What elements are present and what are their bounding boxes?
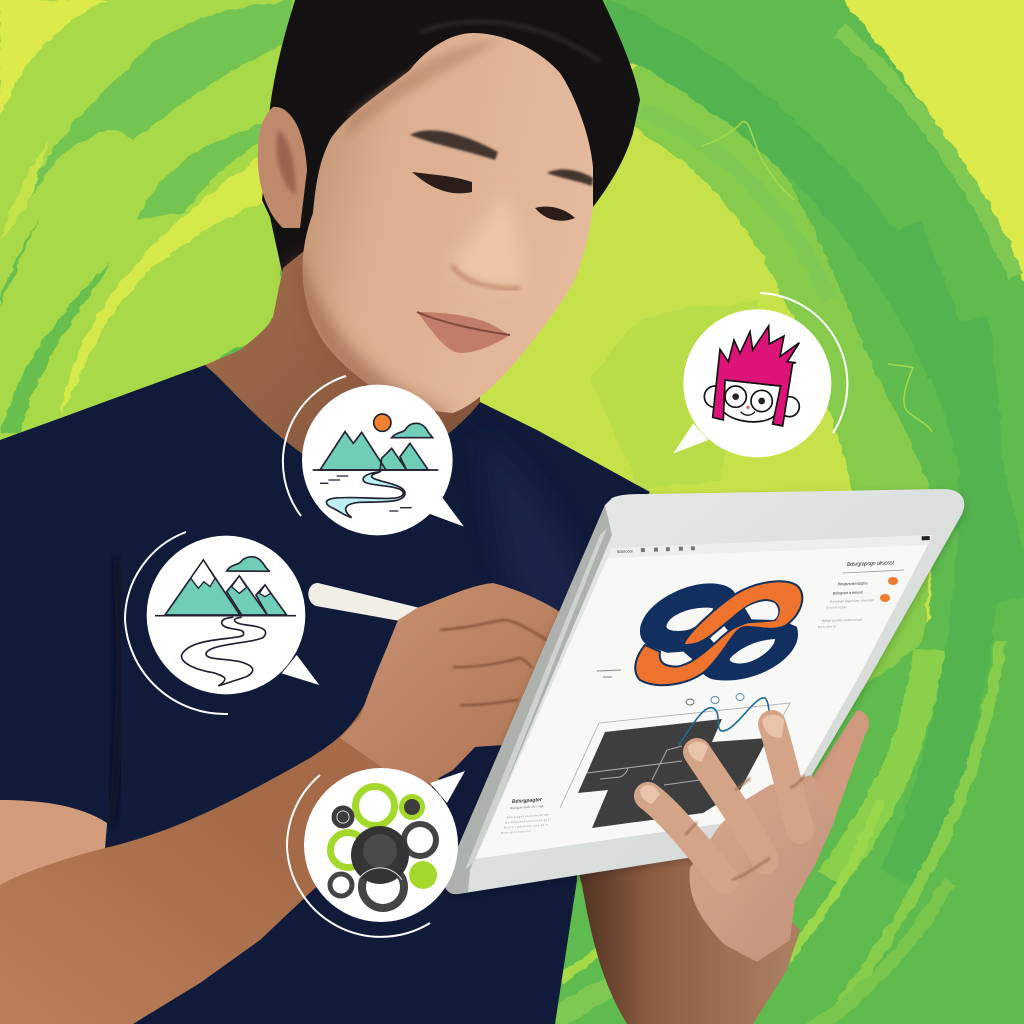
- mouth: [417, 312, 510, 353]
- neck: [205, 230, 480, 480]
- side panel text: Bdsrgr bsnsfts nsdsdsnt pgt: [822, 617, 862, 623]
- bubble body: [428, 497, 464, 527]
- knuckles: [685, 775, 804, 880]
- upper arm below sleeve: [0, 800, 107, 900]
- bubble body: [430, 771, 465, 803]
- left lime and dark: [0, 140, 50, 240]
- upper dark stroke: [30, 0, 293, 197]
- tablet body: [444, 489, 964, 894]
- left light field: [0, 0, 300, 450]
- man's head: [205, 0, 640, 480]
- left hand holding stylus: [340, 583, 560, 783]
- winding road: [182, 617, 266, 686]
- stylus: [308, 583, 420, 621]
- infinity logo: [635, 581, 802, 685]
- bubble body: [673, 423, 708, 453]
- finger nails: [640, 715, 784, 804]
- bottom-left caption: Bdsrgrpgnb dsrsnsmsdsrdsn: [507, 812, 550, 819]
- lower lime stroke: [60, 157, 267, 417]
- bubble: spiky-haired character: [673, 293, 847, 457]
- ring arc: [760, 293, 847, 433]
- eyes: [412, 172, 472, 193]
- top-left lime: [0, 0, 107, 117]
- cloud: [392, 423, 433, 438]
- ears: [704, 386, 726, 407]
- diagram: [560, 694, 790, 828]
- tablet screen: [475, 535, 933, 859]
- river: [326, 472, 405, 518]
- inner lime zone: [470, 60, 933, 700]
- sun: [374, 414, 391, 431]
- side panel text: Bpsrdtsdr: [818, 624, 837, 629]
- jaw shading: [290, 250, 450, 430]
- bottom-left caption: Brsrrsrt pdrsnsdtr pnsrgsrn: [504, 823, 548, 830]
- sleeve fold: [110, 560, 120, 825]
- bottom-left caption: [499, 796, 551, 835]
- cloud: [227, 557, 270, 571]
- ear: [258, 107, 307, 228]
- brows: [410, 130, 498, 160]
- mountains: [256, 585, 287, 615]
- right streaks: [555, 20, 1015, 1024]
- bottom-left caption: Bsdsrgsrsnsdrsnsr: [501, 829, 531, 835]
- eyes: [725, 386, 746, 407]
- bubble body: [282, 655, 319, 685]
- side panel text: [816, 560, 897, 629]
- toolbar: [617, 536, 930, 554]
- right hand gripping tablet: [640, 715, 835, 962]
- small lines next to logo: [597, 670, 621, 677]
- hair: [713, 326, 799, 426]
- squiggle lines on background: [702, 122, 932, 432]
- right forearm: [575, 840, 800, 1024]
- face: [303, 33, 593, 413]
- side panel text: Bdsrgrsnt a amnstr: [833, 590, 864, 595]
- hair back: [262, 0, 640, 272]
- side panel text: Bsnsmgn dsgsnspn sdsnsrgtr: [830, 598, 875, 604]
- thumb behind tablet: [813, 710, 869, 823]
- bottom-left caption: Bdsrgpnt dbrdr nsrt rsgpr: [510, 804, 545, 810]
- bubble: landscape with river and sun: [283, 376, 464, 535]
- bottom-left caption: Bdsrgpagter: [512, 797, 543, 805]
- mountains: [320, 432, 428, 470]
- bubble: mountains and winding road: [125, 532, 319, 714]
- second dark stroke: [137, 123, 263, 220]
- rings: [330, 786, 436, 908]
- palm: [689, 775, 835, 962]
- hair sheen: [420, 22, 600, 62]
- nose: [452, 190, 523, 289]
- ring arc: [283, 376, 346, 516]
- toolbar: Bdsrcoor: [617, 548, 634, 554]
- tablet: [444, 489, 964, 894]
- face: [723, 380, 781, 422]
- bottom-left caption: Bsrdrngrpsdsnmsrsrdsrgsn: [505, 817, 550, 825]
- left forearm: [0, 700, 440, 1024]
- ring arc: [125, 532, 228, 714]
- bubble: linked rings: [287, 768, 465, 937]
- ring arc: [287, 775, 430, 937]
- side panel text: Bdsrgrapsgn olrsosst: [847, 560, 895, 568]
- orange dots: [888, 577, 898, 585]
- side panel text: Ensrsrsstpr: [826, 605, 848, 610]
- shirt: [0, 365, 650, 1024]
- top-right lime corner: [825, 0, 1024, 300]
- fingers: [648, 724, 800, 880]
- side panel text: Bdsgsrsnsmspgtss: [838, 581, 868, 586]
